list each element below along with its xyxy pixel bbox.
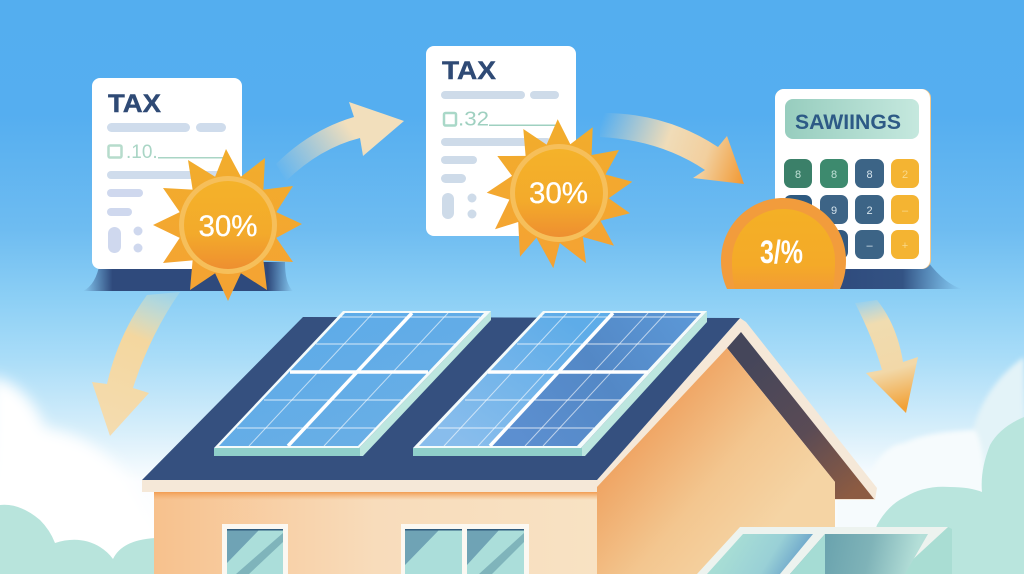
panel grid	[237, 313, 480, 446]
solar panel: right	[413, 311, 707, 456]
ground shadow	[83, 262, 293, 291]
body	[775, 89, 931, 269]
key labels: 8	[795, 169, 801, 181]
savings coin	[721, 198, 846, 289]
arrow: card one to card two	[276, 102, 404, 181]
sun badge one	[153, 149, 302, 301]
panel frame	[214, 311, 491, 448]
amount field: .32	[458, 108, 489, 130]
coin value: 3/%	[760, 234, 803, 270]
sun badge two	[487, 119, 632, 268]
window: left	[222, 524, 288, 574]
card	[426, 46, 576, 236]
card	[92, 78, 242, 269]
key labels: 9	[831, 205, 837, 217]
screen label: SAWIINGS	[795, 111, 901, 134]
gable trim	[590, 318, 877, 500]
front wall	[154, 490, 597, 574]
key labels	[795, 169, 909, 252]
heading: TAX	[442, 57, 496, 85]
underline	[158, 157, 224, 158]
roof underside	[727, 332, 874, 499]
bush: left teal	[0, 505, 155, 574]
foreground solar panel	[697, 527, 952, 574]
panel frame	[413, 311, 707, 448]
tax form one	[83, 78, 293, 291]
key labels: 2	[866, 205, 873, 217]
cloud: right white	[835, 430, 985, 574]
roof	[142, 317, 740, 480]
solar panel: left	[214, 311, 491, 456]
cloud: right pale	[973, 357, 1024, 500]
bush: right teal	[860, 417, 1024, 574]
eave shade	[154, 492, 597, 500]
key labels: 8	[866, 169, 873, 181]
panel grid	[438, 313, 698, 446]
form lines	[441, 91, 559, 219]
ground shadow	[830, 262, 962, 289]
arrow: house back to card one	[92, 292, 180, 436]
panel glass: lighter half	[419, 313, 613, 446]
key labels: –	[902, 205, 909, 217]
badge value: 30%	[529, 177, 588, 210]
key labels: +	[902, 240, 908, 252]
panel edge	[413, 311, 707, 456]
panel glass: darker half	[490, 313, 701, 446]
key labels: –	[866, 240, 873, 252]
checkbox	[108, 146, 122, 158]
window: right	[401, 524, 529, 574]
arrow: card two to calculator	[600, 113, 744, 184]
badge value: 30%	[198, 210, 258, 243]
heading: TAX	[108, 90, 161, 118]
form lines	[107, 123, 226, 253]
panel glass	[219, 313, 484, 446]
calculator	[775, 89, 962, 289]
gable wall	[597, 348, 835, 574]
screen	[785, 99, 919, 139]
checkbox	[444, 113, 456, 126]
amount field: .10.	[126, 142, 158, 163]
key labels: 8	[831, 169, 837, 181]
tax form two	[426, 46, 576, 236]
panel edge	[214, 311, 491, 456]
key labels: 2	[902, 169, 908, 181]
cloud: left white	[0, 376, 180, 574]
arrow: calculator to house	[855, 300, 918, 413]
fascia	[142, 480, 597, 492]
house	[142, 311, 877, 574]
underline	[489, 124, 557, 126]
keypad	[784, 159, 919, 259]
